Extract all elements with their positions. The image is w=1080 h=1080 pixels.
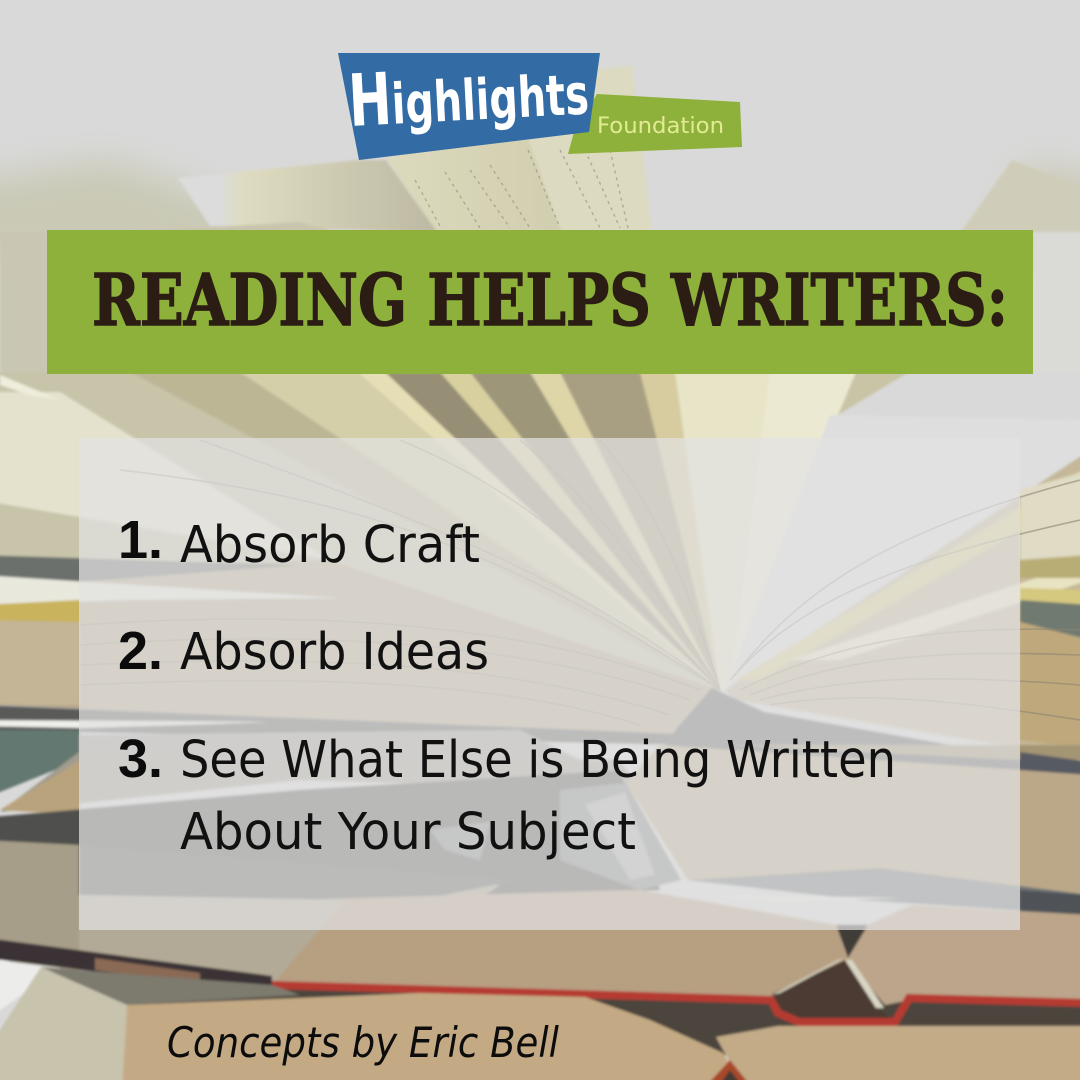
list item 3: See What Else is Being Written bbox=[180, 731, 896, 790]
main open book: page fan bbox=[0, 372, 1080, 830]
list item 3 bbox=[118, 729, 896, 862]
soft haze at top corners bbox=[0, 160, 1080, 260]
list item 2: 2. bbox=[118, 621, 163, 681]
credit line: Concepts by Eric Bell bbox=[167, 1018, 559, 1067]
lower left page fan bbox=[0, 560, 720, 740]
fine page edge lines bbox=[80, 440, 1080, 725]
bottom books bbox=[0, 967, 127, 1080]
list item 1: 1. bbox=[118, 510, 163, 570]
list item 2: Absorb Ideas bbox=[180, 623, 489, 682]
panel: list of reasons bbox=[79, 438, 1020, 930]
list item 1: Absorb Craft bbox=[180, 516, 480, 575]
lower book pages bbox=[272, 890, 850, 1000]
dark base under the red cover bbox=[130, 985, 1080, 1055]
right page fan bbox=[725, 450, 1080, 760]
list item 3: About Your Subject bbox=[180, 803, 636, 862]
logo blue tag bbox=[338, 47, 600, 160]
stacked books under the open book bbox=[0, 688, 1080, 1080]
logo blue tag: Highlights bbox=[346, 47, 591, 143]
right stack page with gutter wedge bbox=[640, 688, 1080, 780]
upper loose pages bbox=[0, 66, 1080, 376]
logo: Highlights Foundation bbox=[338, 47, 742, 160]
logo green tag bbox=[568, 94, 742, 154]
title banner bbox=[47, 230, 1033, 374]
white gap of open pages bbox=[725, 415, 1080, 690]
logo green tag: Foundation bbox=[597, 114, 724, 139]
page text speckle bbox=[415, 150, 628, 228]
spine and red cover bbox=[0, 937, 272, 994]
list item 3: 3. bbox=[118, 729, 163, 789]
